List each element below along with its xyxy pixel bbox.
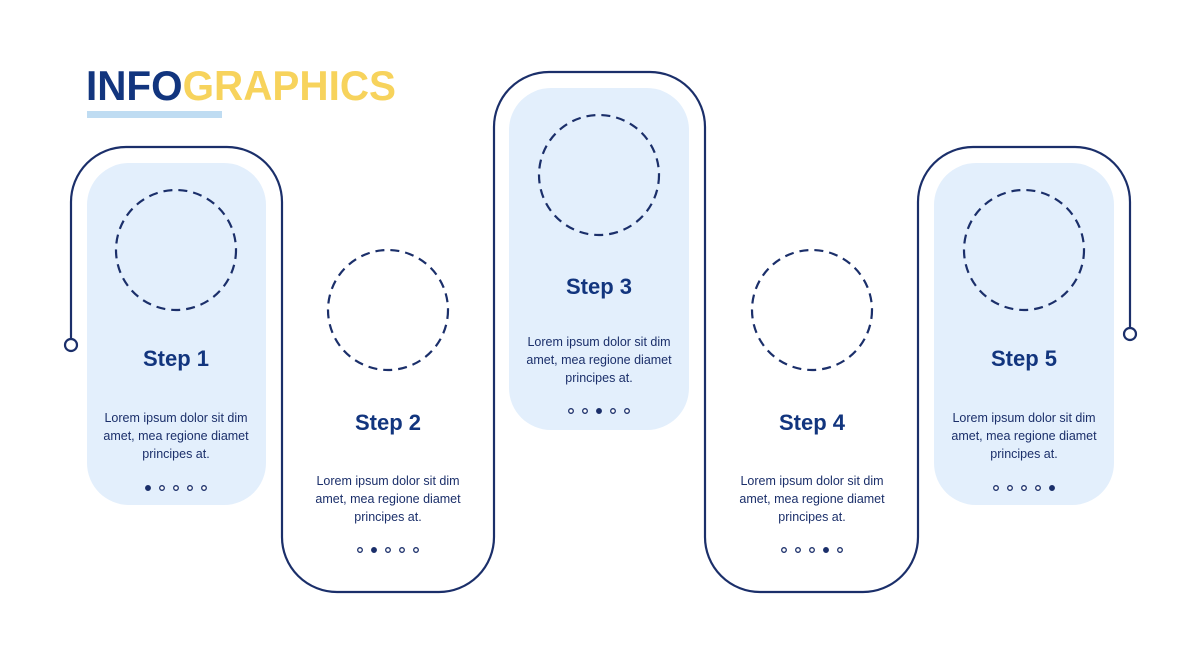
step 2: principes at. [354,510,422,524]
step 1: principes at. [142,447,210,461]
step 4: Lorem ipsum dolor sit dim [740,474,884,488]
step 4 [739,410,885,524]
step 2: Step 2 [355,410,421,435]
step 5 [951,346,1097,461]
connecting path [65,72,1136,592]
title: INFOGRAPHICS [86,62,396,109]
icon placeholders [116,115,1084,370]
step 2: amet, mea regione diamet [315,492,461,506]
step 2: Lorem ipsum dolor sit dim [316,474,460,488]
step 3: Lorem ipsum dolor sit dim [527,335,671,349]
step 4: amet, mea regione diamet [739,492,885,506]
panel backgrounds [87,88,1114,505]
progress dots [146,409,1054,552]
step 4: principes at. [778,510,846,524]
step 1: Step 1 [143,346,209,371]
step 1 [103,346,249,461]
step 3: Step 3 [566,274,632,299]
step 3 [526,274,672,385]
step 1: amet, mea regione diamet [103,429,249,443]
step 4: Step 4 [779,410,846,435]
step 5: principes at. [990,447,1058,461]
step 5: Lorem ipsum dolor sit dim [952,411,1096,425]
step 2 [315,410,461,524]
step 3: amet, mea regione diamet [526,353,672,367]
step 3: principes at. [565,371,633,385]
step 5: amet, mea regione diamet [951,429,1097,443]
step 1: Lorem ipsum dolor sit dim [104,411,248,425]
step 5: Step 5 [991,346,1057,371]
